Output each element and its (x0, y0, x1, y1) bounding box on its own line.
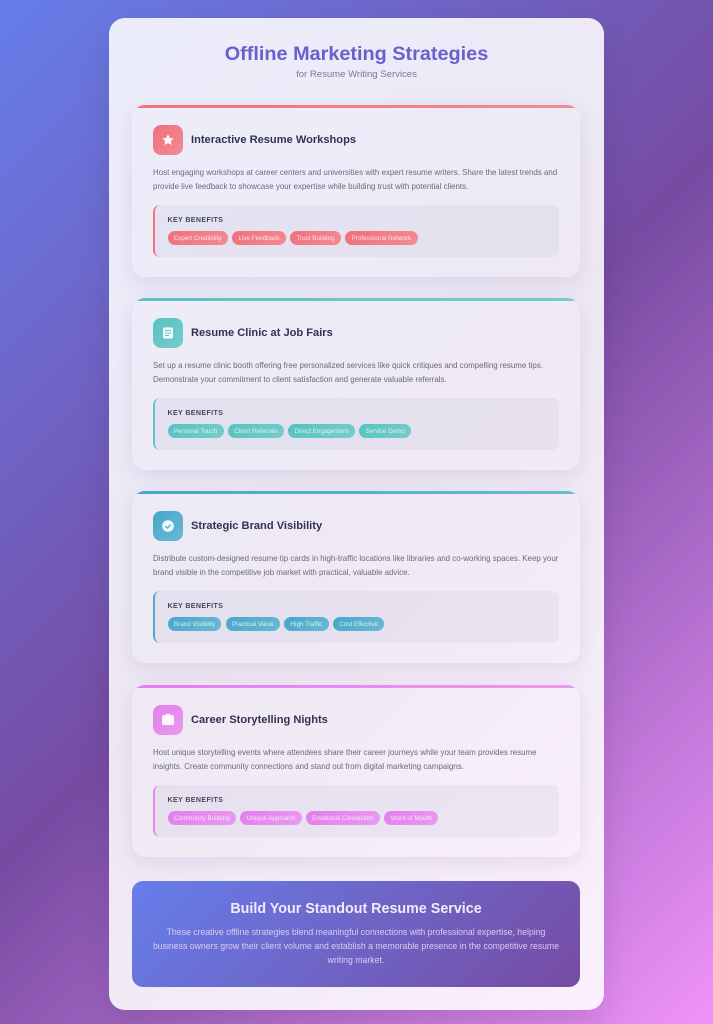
callout text: business owners grow their client volume and establish a memorable presence in the competitive resume (153, 941, 559, 951)
description: Host engaging workshops at career centers and universities with expert resume writers. Share the latest trends and (153, 168, 557, 177)
description: insights. Create community connections and stand out from digital marketing campaigns. (153, 762, 464, 771)
key benefits panel (153, 785, 559, 837)
icon: star (153, 125, 183, 155)
benefit tags: Unique Approach (247, 815, 295, 822)
benefit tags (168, 811, 438, 825)
benefit tags: Direct Engagement (295, 428, 348, 435)
description (153, 554, 558, 577)
panel: Interactive Resume Workshops (132, 105, 580, 277)
benefit tags (168, 424, 411, 438)
key benefits label: KEY BENEFITS (168, 410, 223, 417)
key benefits panel (153, 398, 559, 450)
accent bar: teal (132, 298, 580, 301)
benefit tags: Personal Touch (174, 428, 217, 435)
key benefits label: KEY BENEFITS (168, 797, 223, 804)
panel: Resume Clinic at Job Fairs (132, 298, 580, 470)
callout: Build Your Standout Resume Service (132, 881, 580, 987)
benefit tags: Trust Building (296, 235, 335, 242)
description (153, 748, 537, 771)
description: Set up a resume clinic booth offering free personalized services like quick critiques and compelling resume tips. (153, 361, 543, 370)
benefit tags: High Traffic (291, 621, 322, 628)
benefit tags: Practical Value (232, 621, 274, 628)
accent bar: red (132, 105, 580, 108)
description (153, 361, 543, 384)
card heading: Strategic Brand Visibility (191, 520, 322, 532)
benefit tags: Client Referrals (234, 428, 278, 435)
icon: document (153, 318, 183, 348)
description: provide live feedback to showcase your expertise while building trust with potential clients. (153, 182, 468, 191)
callout text: writing market. (328, 955, 384, 965)
icon: briefcase (153, 705, 183, 735)
title: Offline Marketing Strategies (225, 43, 488, 65)
panel: Career Storytelling Nights (132, 685, 580, 857)
key benefits panel (153, 205, 559, 257)
description: Host unique storytelling events where attendees share their career journeys while your team provides resume (153, 748, 537, 757)
benefit tags: Community Building (174, 815, 230, 822)
card heading: Career Storytelling Nights (191, 714, 328, 726)
key benefits panel (153, 591, 559, 643)
benefit tags: Service Demo (365, 428, 405, 435)
description: brand visible in the competitive job market with practical, valuable advice. (153, 568, 410, 577)
description: Demonstrate your commitment to client satisfaction and generate valuable referrals. (153, 375, 447, 384)
callout text: These creative offline strategies blend meaningful connections with professional expertise, helping (167, 927, 545, 937)
description (153, 168, 557, 191)
benefit tags: Live Feedback (238, 235, 279, 242)
card heading: Interactive Resume Workshops (191, 134, 356, 146)
description: Distribute custom-designed resume tip cards in high-traffic locations like libraries and co-working spaces. Keep your (153, 554, 558, 563)
benefit tags: Brand Visibility (174, 621, 215, 628)
subtitle: for Resume Writing Services (296, 68, 417, 80)
accent bar: pink (132, 685, 580, 688)
benefit tags: Expert Credibility (174, 235, 221, 242)
callout heading: Build Your Standout Resume Service (230, 901, 482, 917)
benefit tags: Professional Network (352, 235, 411, 242)
benefit tags: Word of Mouth (391, 815, 432, 822)
benefit tags: Emotional Connection (312, 815, 374, 822)
icon: check badge (153, 511, 183, 541)
panel: Strategic Brand Visibility (132, 491, 580, 663)
card heading: Resume Clinic at Job Fairs (191, 327, 333, 339)
callout text (153, 927, 559, 965)
key benefits label: KEY BENEFITS (168, 603, 223, 610)
benefit tags: Cost Effective (339, 621, 378, 628)
benefit tags (168, 617, 384, 631)
key benefits label: KEY BENEFITS (168, 217, 223, 224)
accent bar: blue (132, 491, 580, 494)
panel: main container (109, 18, 604, 1010)
benefit tags (168, 231, 418, 245)
